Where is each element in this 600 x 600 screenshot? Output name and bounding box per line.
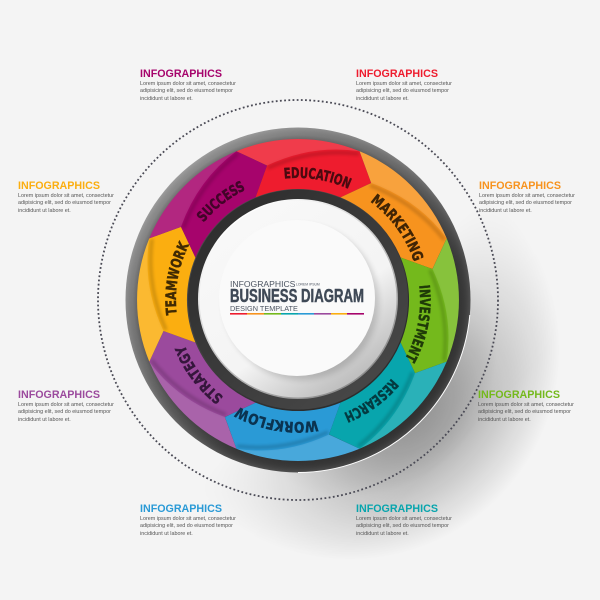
text block: lower right: [478, 389, 574, 423]
segmented colour ring: [133, 135, 463, 465]
text block: bottom right: adipisicing elit, sed do eiusmod tempor: [356, 523, 449, 529]
text block: top left: Lorem ipsum dolor sit amet, consectetur: [140, 81, 236, 87]
segment: education: [236, 139, 371, 197]
text block: lower right: Lorem ipsum dolor sit amet, consectetur: [478, 402, 574, 408]
label: success: SUCCESS: [196, 180, 244, 222]
label: research: RESEARCH: [344, 378, 400, 423]
text block: upper left: Lorem ipsum dolor sit amet, consectetur: [18, 193, 114, 199]
text block: lower right: INFOGRAPHICS: [478, 389, 560, 401]
label: teamwork: TEAMWORK: [165, 240, 190, 316]
text block: upper left: INFOGRAPHICS: [18, 180, 100, 192]
text block: bottom left: adipisicing elit, sed do eiusmod tempor: [140, 523, 233, 529]
text block: lower left: Lorem ipsum dolor sit amet, consectetur: [18, 402, 114, 408]
segment: workflow: [225, 403, 360, 461]
text block: bottom right: INFOGRAPHICS: [356, 503, 438, 515]
text block: upper left: [18, 180, 114, 214]
text block: lower left: adipisicing elit, sed do eiusmod tempor: [18, 409, 111, 415]
segment: investment: [401, 238, 459, 373]
dotted orbit: [98, 100, 498, 500]
text block: top right: [356, 68, 452, 102]
text block: top left: adipisicing elit, sed do eiusmod tempor: [140, 88, 233, 94]
label: strategy: STRATEGY: [174, 347, 223, 404]
text block: upper right: adipisicing elit, sed do eiusmod tempor: [479, 200, 572, 206]
segment: success: [141, 135, 277, 271]
text block: top left: [140, 68, 236, 102]
text block: bottom left: [140, 503, 236, 537]
label: education: EDUCATION: [284, 167, 352, 189]
segment: research: [319, 329, 455, 465]
text block: top right: incididunt ut labore et.: [356, 96, 409, 102]
text block: upper right: Lorem ipsum dolor sit amet, consectetur: [479, 193, 575, 199]
text block: top left: incididunt ut labore et.: [140, 96, 193, 102]
centre title block: INFOGRAPHICS: [230, 279, 296, 289]
label: workflow: WORKFLOW: [234, 408, 319, 433]
text block: top right: INFOGRAPHICS: [356, 68, 438, 80]
outer dark ring: [126, 128, 470, 472]
text block: lower left: INFOGRAPHICS: [18, 389, 100, 401]
segment: strategy: [133, 321, 269, 457]
text block: upper right: INFOGRAPHICS: [479, 180, 561, 192]
text block: top left: INFOGRAPHICS: [140, 68, 222, 80]
segment labels: [165, 167, 431, 433]
text block: upper right: [479, 180, 575, 214]
text block: lower right: adipisicing elit, sed do eiusmod tempor: [478, 409, 571, 415]
segment: teamwork: [137, 227, 195, 362]
text block: bottom right: Lorem ipsum dolor sit amet, consectetur: [356, 516, 452, 522]
text block: bottom right: incididunt ut labore et.: [356, 531, 409, 537]
centre title block: [230, 279, 364, 315]
text block: bottom left: INFOGRAPHICS: [140, 503, 222, 515]
central white plate: [200, 200, 396, 398]
text block: top right: adipisicing elit, sed do eiusmod tempor: [356, 88, 449, 94]
silver bezel: [198, 199, 398, 399]
inner dark ring: [188, 190, 408, 410]
centre title block: BUSINESS DIAGRAM: [230, 286, 364, 306]
text block: top right: Lorem ipsum dolor sit amet, consectetur: [356, 81, 452, 87]
text block: bottom left: Lorem ipsum dolor sit amet, consectetur: [140, 516, 236, 522]
segment: marketing: [327, 143, 463, 279]
text block: lower left: incididunt ut labore et.: [18, 417, 71, 423]
text block: upper left: adipisicing elit, sed do eiusmod tempor: [18, 200, 111, 206]
cast shadow: [246, 246, 550, 550]
colour bar: [230, 313, 364, 315]
text block: lower right: incididunt ut labore et.: [478, 417, 531, 423]
label: investment: INVESTMENT: [406, 285, 431, 364]
circular diagram: [97, 99, 550, 550]
text block: lower left: [18, 389, 114, 423]
text block: upper left: incididunt ut labore et.: [18, 208, 71, 214]
text block: bottom right: [356, 503, 452, 537]
text block: upper right: incididunt ut labore et.: [479, 208, 532, 214]
centre title block: DESIGN TEMPLATE: [230, 304, 298, 313]
centre title block: LOREM IPSUM: [296, 282, 320, 286]
text block: bottom left: incididunt ut labore et.: [140, 531, 193, 537]
label: marketing: MARKETING: [370, 194, 424, 262]
